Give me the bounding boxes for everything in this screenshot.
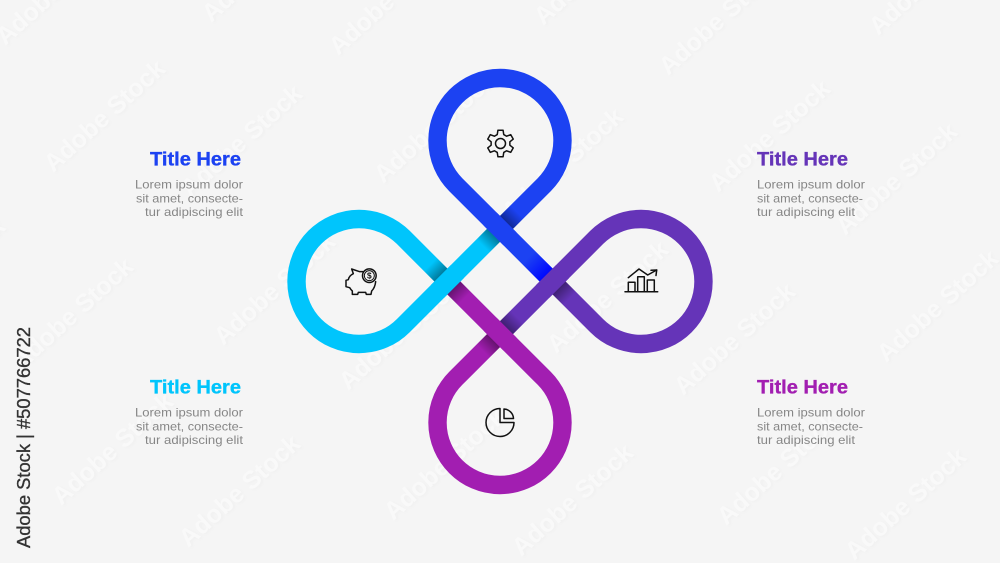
watermarks: Adobe Stock — [39, 54, 171, 178]
crossing: bottom, magenta over purple — [473, 307, 527, 361]
icon: piggy bank — [346, 269, 376, 294]
body: bottom left: sit amet, consecte- — [136, 419, 243, 433]
body: top right — [757, 178, 865, 219]
watermarks: Adobe Stock — [831, 117, 963, 241]
loop: magenta bottom — [437, 282, 562, 485]
watermarks: Adobe Stock — [840, 442, 972, 563]
loop: blue top — [438, 78, 562, 282]
body: bottom left: Lorem ipsum dolor — [135, 406, 243, 420]
heading: top left: Title Here — [150, 149, 241, 170]
loop: cyan left — [297, 219, 500, 344]
body: top right: Lorem ipsum dolor — [757, 178, 865, 192]
watermarks: Adobe Stock — [497, 102, 629, 226]
watermarks: Adobe Stock — [47, 387, 179, 511]
watermarks: Adobe Stock — [507, 438, 639, 562]
loop: purple right — [500, 219, 703, 344]
watermarks: Adobe Stock — [369, 65, 501, 189]
body: top right: tur adipiscing elit — [757, 205, 856, 219]
body: top left: tur adipiscing elit — [145, 205, 244, 219]
crossing: left, cyan over magenta — [421, 255, 474, 308]
body: bottom right — [757, 406, 865, 447]
text block: top right — [757, 149, 865, 219]
stock credit: Adobe Stock | #507766722 — [13, 327, 34, 548]
body: bottom left — [135, 406, 244, 447]
watermarks: Adobe Stock — [176, 79, 308, 203]
body: bottom right: sit amet, consecte- — [757, 419, 863, 433]
watermarks: Adobe Stock — [542, 235, 674, 359]
watermarks: Adobe Stock — [669, 277, 801, 401]
icon: gear — [488, 130, 513, 157]
watermarks: Adobe Stock — [334, 272, 466, 396]
heading: bottom right: Title Here — [757, 377, 848, 398]
icon: pie chart — [486, 408, 514, 437]
heading: top right: Title Here — [757, 149, 848, 170]
crossing: top, blue over cyan — [473, 202, 527, 256]
body: top left — [135, 178, 244, 219]
heading: bottom left: Title Here — [150, 377, 241, 398]
body: top left: sit amet, consecte- — [136, 191, 243, 205]
body: top left: Lorem ipsum dolor — [135, 178, 243, 192]
crossing: right, purple over blue — [519, 248, 579, 308]
text block: bottom left — [135, 377, 244, 447]
watermarks: Adobe Stock — [712, 407, 844, 531]
watermarks: Adobe Stock — [209, 227, 341, 351]
body: bottom right: Lorem ipsum dolor — [757, 406, 865, 420]
watermarks: Adobe Stock — [174, 429, 306, 553]
text block: top left — [135, 149, 244, 219]
watermarks: Adobe Stock — [704, 74, 836, 198]
text block: bottom right — [757, 377, 865, 447]
body: bottom left: tur adipiscing elit — [145, 433, 244, 447]
icon: bar chart with arrow — [625, 269, 658, 292]
body: bottom right: tur adipiscing elit — [757, 433, 856, 447]
knot diagram — [297, 78, 703, 485]
watermarks: Adobe Stock — [379, 402, 511, 526]
body: top right: sit amet, consecte- — [757, 191, 863, 205]
icon: piggy bank: $ — [367, 271, 372, 281]
watermarks: Adobe Stock — [872, 244, 1000, 368]
watermarks: Adobe Stock — [7, 252, 139, 376]
